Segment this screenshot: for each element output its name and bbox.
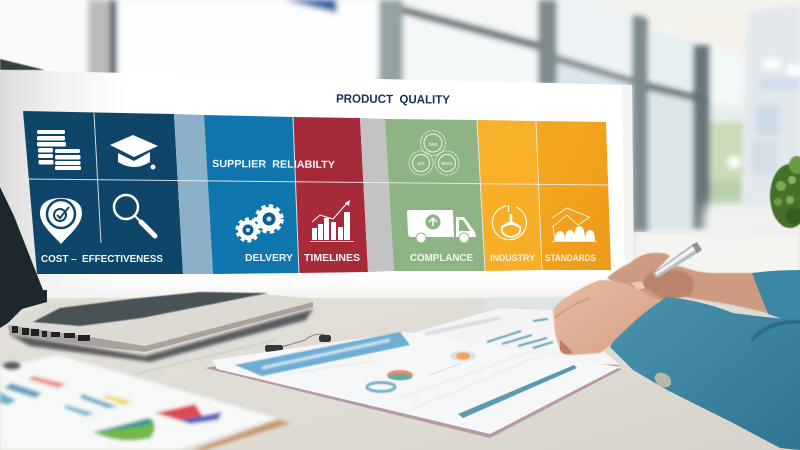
label: supplier reliability: SUPPLIER RELIABILTY (212, 158, 335, 171)
icon: circular arrow emblem (492, 205, 526, 240)
laptop front edge (8, 302, 313, 352)
cuff button (652, 370, 674, 390)
sheet bar (458, 365, 577, 418)
laptop screen (0, 187, 47, 328)
cell: green compliance (385, 119, 485, 271)
foreground clipboard page (0, 355, 291, 450)
icon: line chart over peaks (552, 208, 597, 242)
laptop base shadow (8, 309, 313, 362)
label: cost-effectiveness: COST – EFFECTIVENESS (41, 254, 163, 265)
background: office windows (0, 0, 800, 300)
cell: light orange industry (477, 120, 542, 271)
report sheet: back (405, 308, 620, 368)
cell: blue supplier (204, 115, 299, 274)
icon: delivery truck (407, 210, 476, 243)
laptop (0, 187, 313, 362)
icon: three circular seals: RACI (442, 161, 452, 166)
report sheet: front (205, 332, 622, 438)
label: delivery: DELVERY (245, 252, 293, 264)
background: dark wedge (0, 59, 45, 70)
label: timelines: TIMELINES (304, 252, 360, 264)
pen (653, 242, 702, 278)
icon: three circular seals: TAS (429, 142, 437, 147)
label: industry: INDUSTRY (490, 253, 536, 264)
label: compliance: COMPLANCE (410, 252, 473, 264)
cell: grey strip (360, 118, 394, 272)
cell: red (293, 117, 368, 273)
grid lines (25, 113, 608, 273)
earbuds (265, 334, 331, 352)
teal sleeve (610, 270, 800, 450)
icon: target pin (40, 198, 82, 244)
laptop ports (12, 326, 90, 341)
cell: navy cost-effectiveness (23, 111, 183, 274)
translucent panel (0, 70, 634, 298)
tablet behind papers (485, 297, 565, 309)
icon: stacked coins (37, 130, 81, 170)
hands and pen (553, 242, 768, 355)
label: standards: STANDARDS (545, 253, 596, 264)
laptop keyboard (33, 292, 268, 326)
plant (770, 156, 800, 228)
hand: lower (553, 280, 663, 355)
icon: graduation cap (110, 135, 158, 170)
cell: dark orange standards (536, 121, 611, 270)
icon: three circular seals: .ICI. (417, 161, 425, 166)
matrix cells (23, 111, 611, 274)
nail (631, 281, 645, 290)
sheet header band (235, 332, 410, 376)
icon: three circular seals (409, 130, 459, 175)
desk surface (0, 205, 800, 450)
background: roll-up banner (727, 5, 800, 240)
icon: bar chart with arrow (310, 200, 354, 242)
icon: gears (238, 207, 281, 240)
sheet donut charts (367, 382, 395, 392)
heading: product quality: PRODUCT QUALITY (336, 92, 450, 107)
cell: light blue strip (174, 114, 213, 274)
laptop deck (8, 292, 313, 346)
foreground colour marks (28, 376, 66, 388)
icon: magnifying glass (114, 195, 155, 236)
hand: upper (607, 253, 768, 313)
